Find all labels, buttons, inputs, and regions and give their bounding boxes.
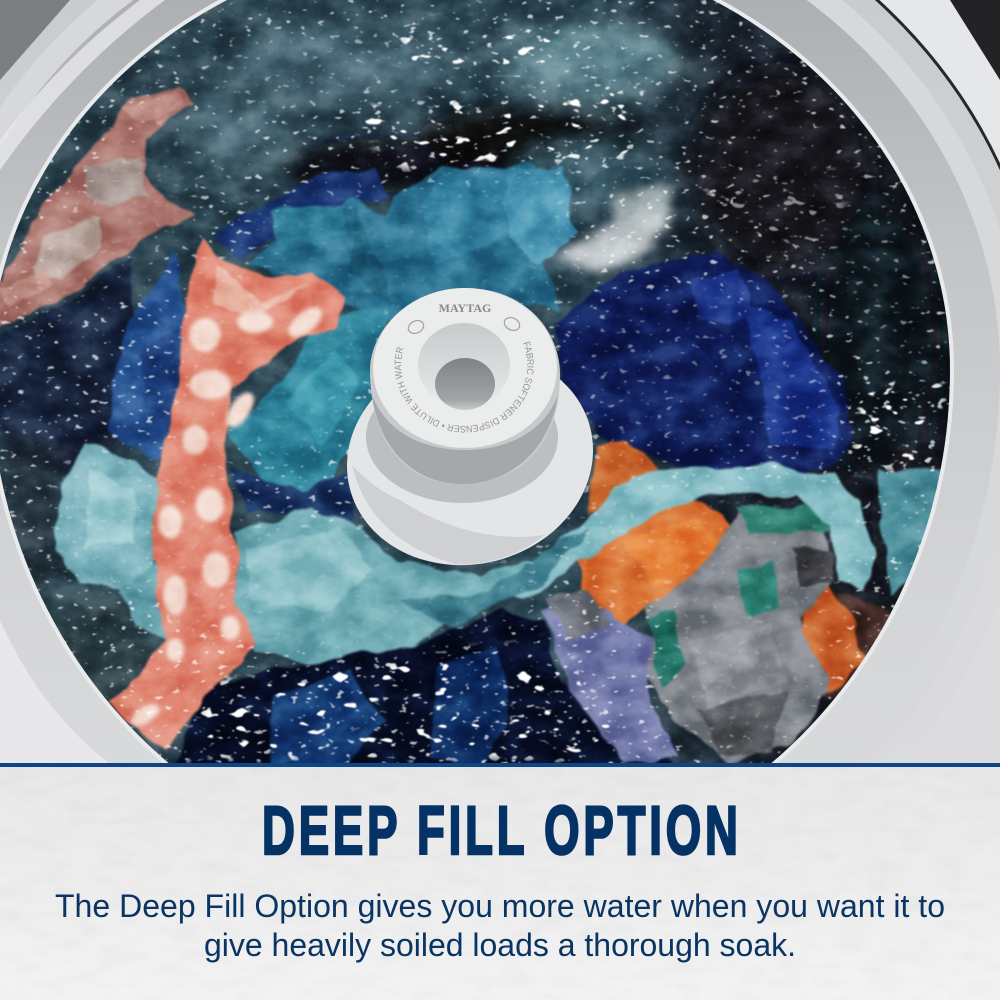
fabric: navy at bottom (170, 610, 680, 770)
fabric: denim (108, 250, 187, 457)
fabric: purple gray (543, 590, 680, 765)
fabric fold shading (0, 0, 980, 780)
fabric: pale teal lower centre (235, 510, 560, 668)
description text: The Deep Fill Option gives you more water when you want it to (55, 888, 945, 924)
description text (55, 888, 945, 963)
description text: give heavily soiled loads a thorough soak. (204, 927, 796, 963)
fabric: teal band at right (480, 463, 943, 603)
coral garment white patches (127, 301, 327, 730)
gray foam patch in water (555, 186, 672, 274)
fabric: blue band above teal (210, 168, 388, 262)
fabric: pale teal left (55, 443, 170, 640)
fabric: teal twist left of dispenser (228, 305, 390, 520)
fabric: gray striped (647, 505, 835, 762)
water sparkle highlights (0, 0, 1000, 770)
fabric folds group (0, 87, 943, 770)
caption panel (0, 763, 1000, 1000)
fabric: pink at top left (0, 87, 197, 330)
logo marks (406, 315, 522, 336)
cup top face (373, 288, 557, 448)
cup inner hole (435, 358, 495, 410)
washer rim (0, 0, 1000, 763)
fabric: orange (575, 442, 742, 625)
drum interior with water (0, 0, 1000, 780)
fabric: dark navy left (0, 255, 135, 440)
fabric: dark brown and orange at right (800, 584, 891, 699)
fabric: coral garment (105, 237, 347, 752)
larger water glints (185, 12, 950, 763)
fabric: teal centre (245, 163, 575, 325)
base disk (347, 379, 593, 566)
dispenser ring text: FABRIC SOFTENER DISPENSER • DILUTE WITH WATER (394, 341, 534, 433)
middle collar (366, 410, 558, 503)
photo: washer drum (0, 0, 1000, 763)
title: DEEP FILL OPTION (262, 793, 738, 869)
fabric: navy at right (555, 253, 852, 470)
cup opening (418, 323, 510, 392)
brand label: MAYTAG (439, 301, 491, 315)
cup sidewall (370, 288, 560, 484)
fabric softener dispenser (347, 288, 593, 566)
